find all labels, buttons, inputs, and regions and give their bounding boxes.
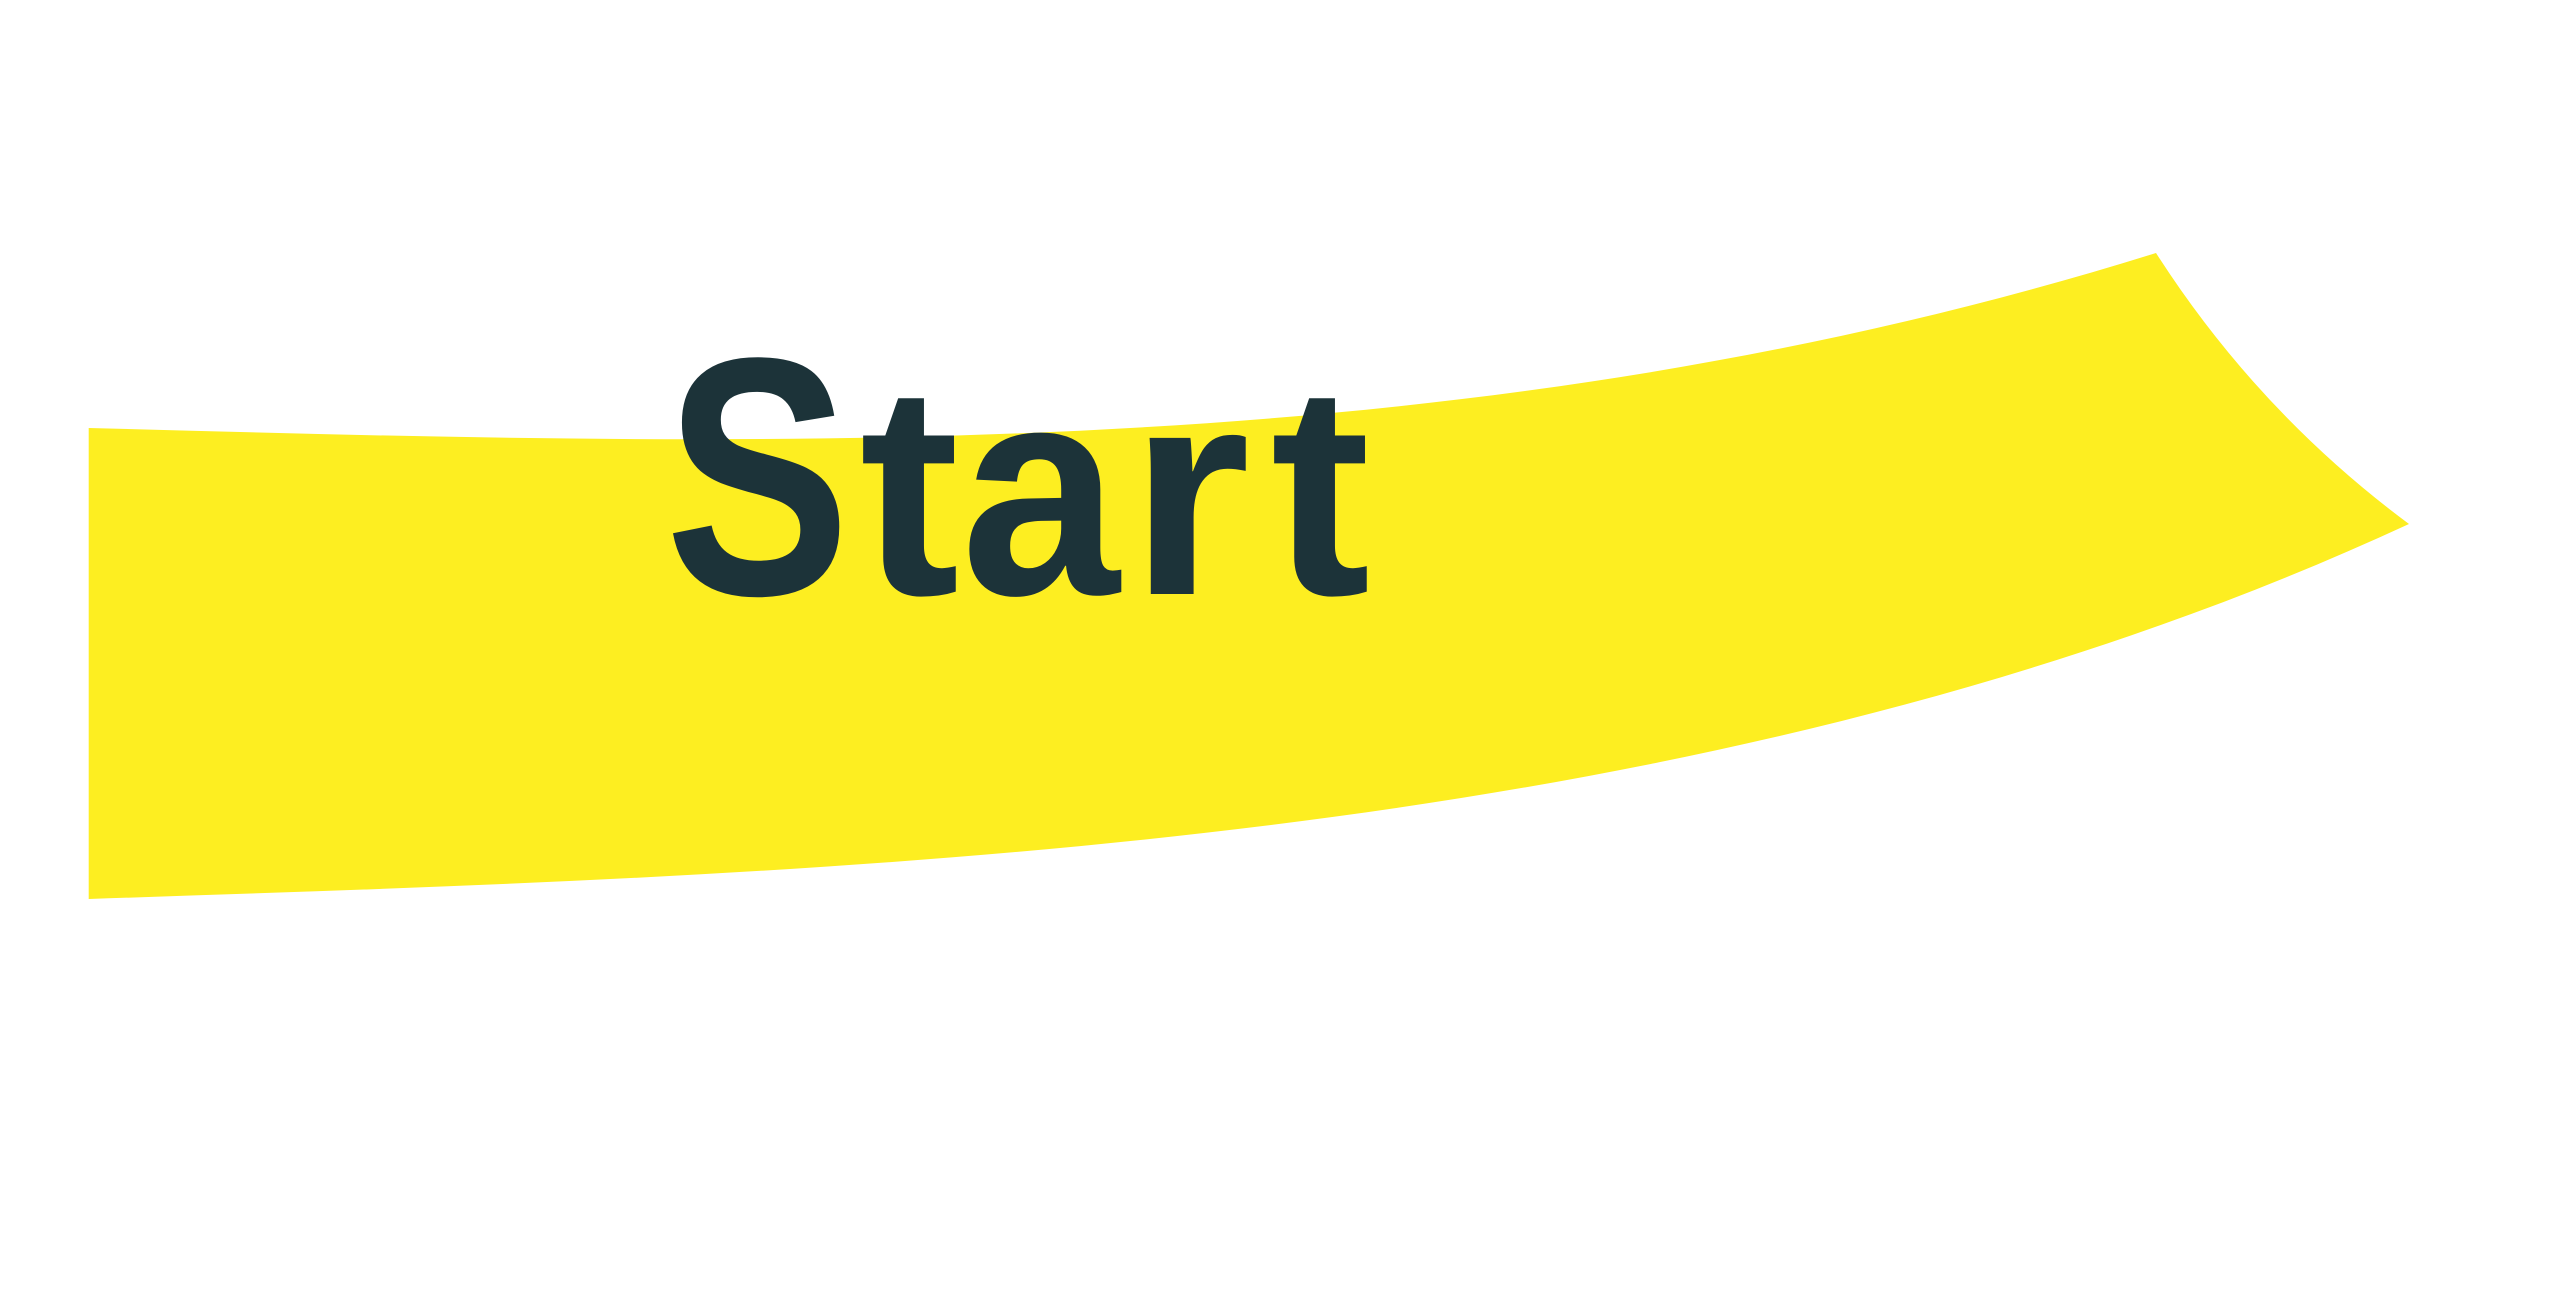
- title: Start: r: [1129, 326, 1250, 657]
- title: Start: S: [664, 287, 850, 666]
- title: Start: [664, 287, 1370, 666]
- title: Start: a: [961, 322, 1120, 658]
- title: Start: t: [1270, 322, 1370, 658]
- title: Start: t: [860, 322, 959, 658]
